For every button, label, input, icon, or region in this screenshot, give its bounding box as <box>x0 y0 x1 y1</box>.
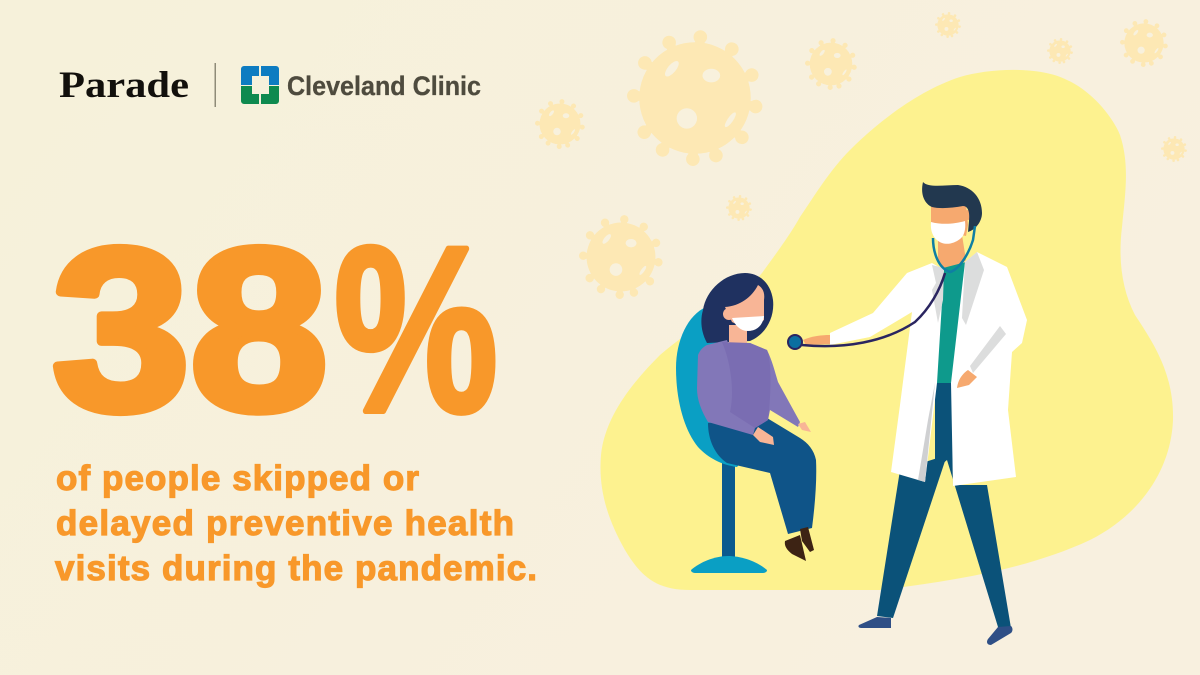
coat shading <box>932 252 1006 373</box>
chair base <box>691 556 767 573</box>
sweater shading <box>722 342 770 428</box>
stethoscope <box>788 226 975 349</box>
mask <box>931 221 965 244</box>
chair back <box>676 307 760 467</box>
wordmark: Cleveland Clinic <box>287 71 481 101</box>
hands <box>803 335 830 345</box>
big stat: 38%: 38 <box>52 201 328 458</box>
neck <box>938 235 966 275</box>
chair pole <box>722 450 735 565</box>
hair <box>701 273 773 343</box>
big stat: 38%: % <box>334 198 498 462</box>
shirt <box>936 262 966 383</box>
right leg <box>935 380 1011 628</box>
description text: visits during the pandemic. <box>55 549 537 588</box>
sweater <box>697 340 800 435</box>
illustration: doctor <box>788 182 1027 645</box>
description text: of people skipped or <box>56 459 419 498</box>
logo divider <box>214 63 216 107</box>
description text: delayed preventive health <box>56 504 514 543</box>
icon: Cleveland Clinic cross <box>241 66 279 104</box>
viruses background <box>535 12 1187 299</box>
logo: Parade: Parade <box>59 65 189 106</box>
yellow blob <box>600 70 1173 590</box>
hair <box>922 182 982 232</box>
face <box>725 285 764 331</box>
logo: Cleveland Clinic <box>241 66 481 104</box>
shoes <box>785 535 806 561</box>
shoes <box>858 617 891 628</box>
description text <box>55 459 537 588</box>
coat <box>830 252 1027 486</box>
illustration: patient on chair <box>676 273 816 573</box>
hands <box>753 427 774 445</box>
big stat: 38% <box>52 198 498 462</box>
left leg <box>877 455 947 618</box>
pants <box>708 418 816 534</box>
face <box>931 204 968 236</box>
neck <box>729 325 747 348</box>
mask <box>732 316 764 331</box>
